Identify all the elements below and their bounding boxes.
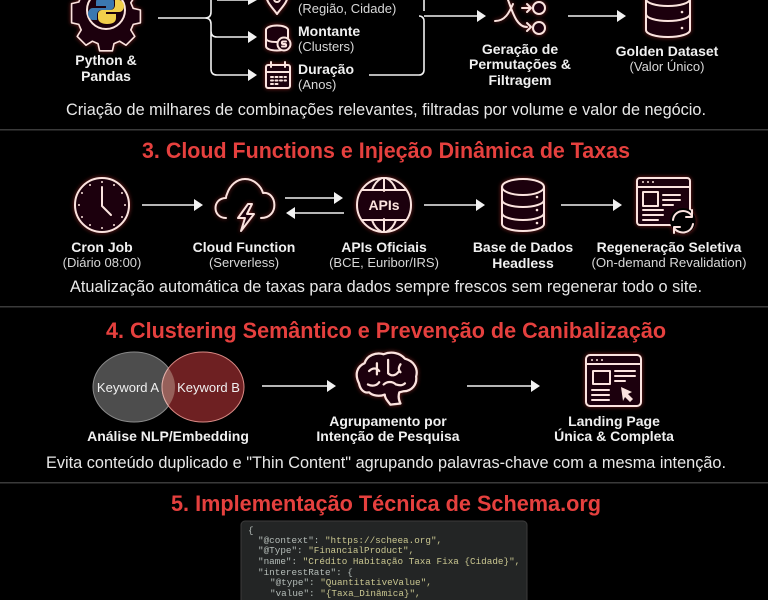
label: Base de Dados Headless: Headless (492, 255, 554, 271)
label: Região, Cidade: (Região, Cidade) (298, 1, 396, 16)
venn diagram keywords: Keyword A (97, 380, 159, 395)
label: Análise NLP/Embedding: Análise NLP/Embedding (87, 428, 249, 444)
label: Golden Dataset: Golden Dataset (616, 43, 719, 59)
icon: permutation shuffle (495, 0, 545, 34)
label: Geração de Permutações & Filtragem: Geração de (482, 41, 558, 57)
icon: location pin (266, 0, 288, 14)
venn diagram keywords (93, 352, 244, 422)
label: Landing Page Única & Completa: Landing Page (568, 413, 660, 429)
arrow (467, 380, 540, 392)
label: On-demand Revalidation: (On-demand Revalidation) (592, 255, 746, 270)
label: Regeneração Seletiva: Regeneração Seletiva (597, 239, 742, 255)
label: Montante: Montante (298, 23, 360, 39)
label: Cloud Function: Cloud Function (193, 239, 295, 255)
label: Duração: Duração (298, 61, 354, 77)
label: Clusters: (Clusters) (298, 39, 354, 54)
panel: section 4 clustering (46, 318, 726, 472)
icon: golden dataset database (646, 0, 690, 37)
arrows: split bracket (158, 0, 257, 81)
venn diagram keywords: Keyword B (177, 380, 240, 395)
icon: coins database (266, 26, 290, 50)
label: Python & Pandas: Python & (75, 52, 137, 68)
label: Cron Job: Cron Job (71, 239, 133, 255)
icon: window refresh (637, 178, 696, 234)
label: Anos: (Anos) (298, 77, 336, 92)
heading 5: 5. Implementação Técnica de Schema.org (171, 491, 601, 516)
icon: database (502, 179, 544, 231)
label: Diário 08:00: (Diário 08:00) (63, 255, 141, 270)
icon: globe APIs: APIs (368, 197, 400, 213)
arrow (262, 380, 336, 392)
label: Valor Único: (Valor Único) (630, 59, 704, 74)
panel: section 5 schema.org (171, 491, 601, 600)
code block (241, 521, 527, 600)
code block: "interestRate": { (258, 567, 353, 578)
label: APIs Oficiais: APIs Oficiais (341, 239, 427, 255)
icon: cloud lightning (216, 179, 274, 231)
arrow (568, 10, 626, 22)
label: Geração de Permutações & Filtragem: Filtragem (488, 72, 552, 88)
caption section 2: Criação de milhares de combinações relevantes, filtradas por volume e valor de negócio. (66, 100, 706, 119)
label: Python & Pandas: Pandas (81, 68, 131, 84)
code block: { (248, 525, 254, 536)
code block: "@type": "QuantitativeValue", (270, 577, 432, 588)
label: Agrupamento por Intenção de Pesquisa: Agrupamento por (329, 413, 447, 429)
arrow (142, 199, 203, 211)
code block: "@context": "https://scheea.org", (258, 535, 442, 546)
panel: section 2 permutations (66, 0, 719, 119)
heading 4: 4. Clustering Semântico e Prevenção de Canibalização (106, 318, 666, 343)
panel: section 3 cloud functions (63, 138, 746, 296)
label: Agrupamento por Intenção de Pesquisa: Intenção de Pesquisa (316, 428, 460, 444)
icon: landing page window (586, 355, 641, 406)
arrow (424, 199, 485, 211)
icon: globe APIs (357, 178, 411, 232)
label: Geração de Permutações & Filtragem: Permutações & (469, 56, 571, 72)
icon: clock (75, 178, 129, 232)
caption section 4: Evita conteúdo duplicado e "Thin Content" agrupando palavras-chave com a mesma intenção. (46, 453, 726, 472)
label: BCE, Euribor/IRS: (BCE, Euribor/IRS) (329, 255, 439, 270)
caption section 3: Atualização automática de taxas para dados sempre frescos sem regenerar todo o site. (70, 277, 702, 296)
arrows: two-way (285, 192, 344, 219)
code block: "@Type": "FinancialProduct", (258, 545, 414, 556)
label: Landing Page Única & Completa: Única & Completa (554, 427, 674, 444)
icon: python gear (72, 0, 140, 51)
arrows: merge bracket (369, 0, 486, 75)
arrow (561, 199, 622, 211)
label: Base de Dados Headless: Base de Dados (473, 239, 573, 255)
label: Serverless: (Serverless) (209, 255, 279, 270)
code block: "name": "Crédito Habitação Taxa Fixa {Cidade}", (258, 556, 520, 567)
icon: brain (357, 353, 417, 405)
heading 3: 3. Cloud Functions e Injeção Dinâmica de Taxas (142, 138, 630, 163)
icon: calendar (266, 62, 290, 88)
code block: "value": "{Taxa_Dinâmica}", (270, 588, 421, 599)
